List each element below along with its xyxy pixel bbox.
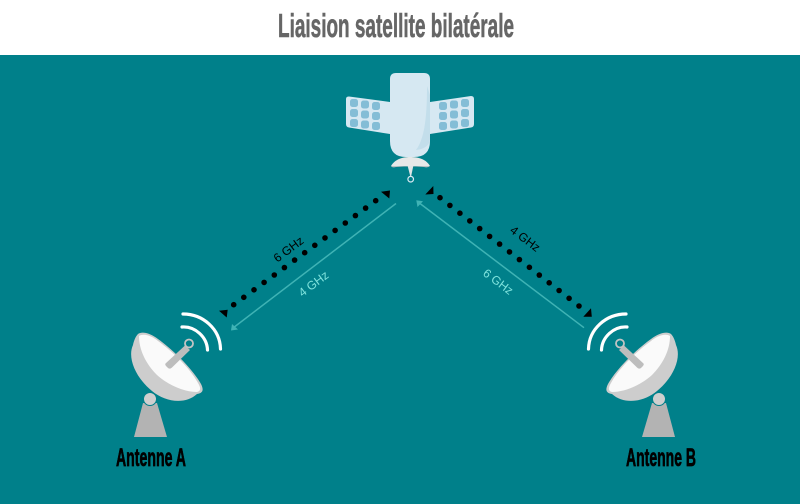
label: Antenne B: Antenne B (626, 444, 696, 472)
left solar panel (346, 96, 390, 134)
downlink: 4 GHz teal arrow (231, 204, 396, 330)
label: 4 GHz: 4 GHz (507, 223, 543, 255)
uplink: 4 GHz dotted arrow to satellite (425, 186, 592, 317)
body shading (416, 86, 430, 150)
icon: antenna B (588, 314, 678, 437)
satellite stem and ring (408, 166, 413, 176)
icon: antenna A (131, 314, 220, 437)
icon: satellite (346, 73, 474, 182)
label: Antenne A: Antenne A (116, 444, 186, 472)
downlink: 6 GHz teal arrow (416, 200, 584, 328)
label: 6 GHz: 6 GHz (271, 233, 306, 265)
satellite body (390, 73, 430, 157)
satellite base (391, 157, 430, 166)
label: 4 GHz: 4 GHz (296, 268, 331, 300)
title: Liaision satellite bilatérale (278, 7, 514, 44)
right solar panel (430, 96, 474, 134)
label: 6 GHz: 6 GHz (480, 266, 516, 298)
uplink: 6 GHz dotted arrow to satellite (219, 190, 390, 318)
